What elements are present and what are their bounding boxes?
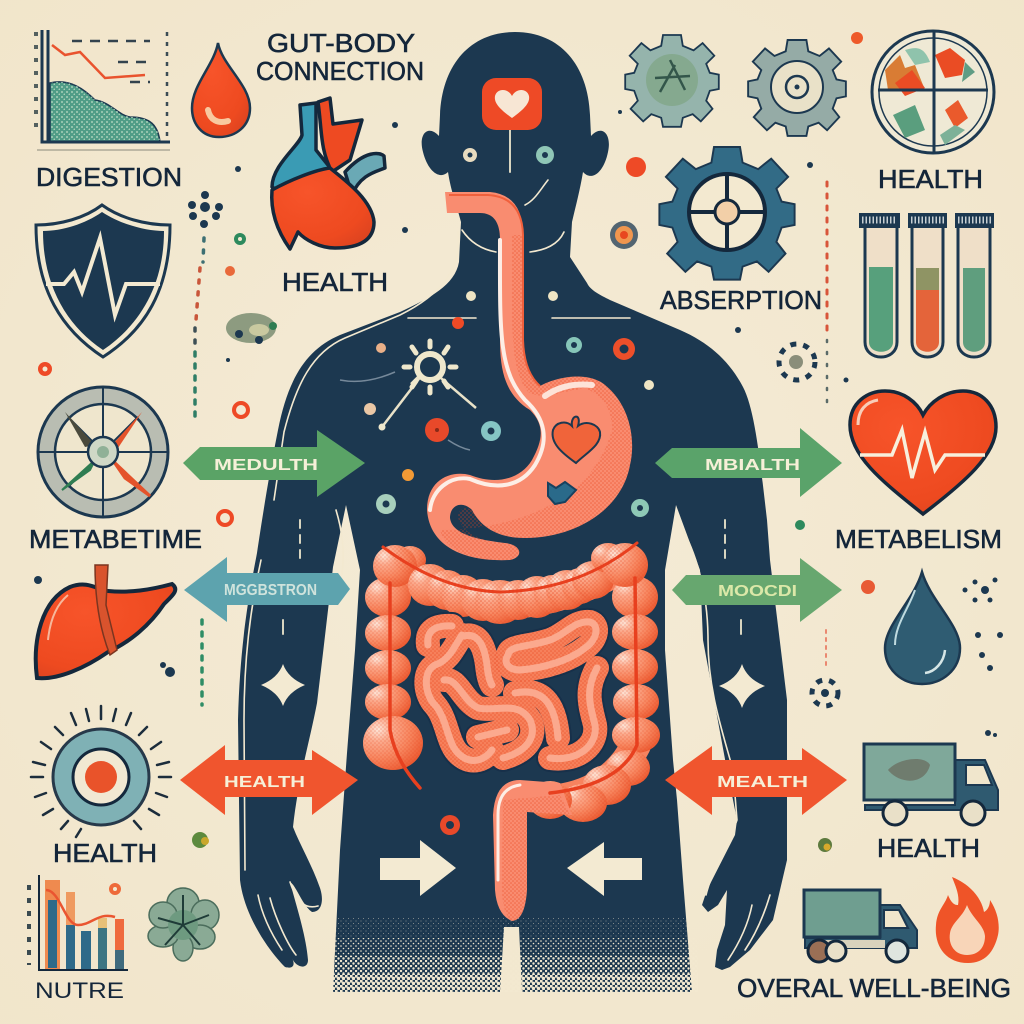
icon: target with rays bbox=[31, 706, 171, 837]
icon: large gear bbox=[659, 147, 795, 280]
label: digestion: DIGESTION bbox=[36, 162, 182, 192]
icon: test tubes bbox=[859, 213, 994, 357]
stomach and esophagus bbox=[427, 192, 632, 560]
red vessel lines bbox=[383, 543, 637, 793]
title bbox=[256, 28, 424, 86]
body silhouette bbox=[238, 32, 787, 992]
icon: flame bbox=[936, 877, 999, 963]
arrow: mhealth bbox=[655, 428, 842, 497]
arrow: health left: HEALTH bbox=[224, 774, 305, 791]
label: health plate: HEALTH bbox=[878, 164, 983, 194]
arrow: mealth bbox=[665, 746, 847, 815]
cream arrows on hips bbox=[380, 840, 642, 896]
icon: delivery truck upper bbox=[864, 744, 998, 825]
label: metabetime: METABETIME bbox=[29, 524, 202, 554]
arrow: teal digestion bbox=[184, 557, 350, 622]
icon: head heart badge bbox=[482, 78, 542, 130]
arrow: mood: MOOCDI bbox=[718, 583, 797, 600]
icon: stomach blue mark bbox=[548, 482, 576, 504]
icon: delivery truck lower bbox=[804, 890, 917, 962]
icon: shield bbox=[36, 205, 170, 357]
arrow: medulth: MEDULTH bbox=[214, 457, 318, 474]
rectum bbox=[493, 780, 572, 921]
arrow: mhealth: MBIALTH bbox=[705, 457, 800, 474]
cream stars on arms bbox=[261, 664, 765, 708]
icon: heart with pulse bbox=[850, 391, 996, 514]
head small nodes bbox=[463, 146, 554, 164]
body contour lines bbox=[244, 180, 770, 960]
icon: leafy cluster bbox=[148, 888, 219, 961]
colon lumps bbox=[363, 543, 660, 822]
label: absorption: ABSERPTION bbox=[660, 285, 822, 315]
icon: anatomical heart bbox=[272, 98, 385, 249]
icon: gear target bbox=[748, 40, 846, 136]
arrow: mealth: MEALTH bbox=[717, 774, 808, 791]
label: health heart: HEALTH bbox=[282, 267, 388, 297]
neck and centre arm ticks bbox=[283, 128, 741, 634]
bar chart: nutrients bbox=[29, 875, 128, 970]
icon: stomach heart bbox=[553, 417, 600, 463]
icon: compass wheel bbox=[38, 387, 168, 517]
icon: blood drop bbox=[192, 43, 250, 137]
icon: plate of food bbox=[872, 31, 994, 153]
label: metabolism: METABELISM bbox=[835, 524, 1002, 554]
halftone leg fade bbox=[330, 918, 698, 992]
title: CONNECTION bbox=[256, 56, 424, 86]
chest nodes and molecule bbox=[340, 291, 654, 835]
arrow: teal digestion: MGGBSTRON bbox=[224, 582, 317, 599]
arrow: medulth bbox=[183, 430, 365, 497]
label: nutre: NUTRE bbox=[35, 978, 124, 1003]
decorative specks and microbes bbox=[34, 32, 1003, 895]
colon bands bbox=[395, 563, 636, 800]
arrow: mood bbox=[672, 558, 842, 622]
icon: liver bbox=[36, 565, 175, 678]
chart: digestion area chart bbox=[36, 30, 170, 150]
large intestine bbox=[363, 543, 660, 921]
label: overall well-being: OVERAL WELL-BEING bbox=[737, 973, 1011, 1003]
label: health truck: HEALTH bbox=[877, 833, 980, 863]
small intestine bbox=[426, 622, 597, 760]
label: health target: HEALTH bbox=[53, 838, 157, 868]
title: GUT-BODY bbox=[267, 28, 415, 58]
arrow: health left bbox=[180, 745, 358, 815]
icon: gear microbe bbox=[625, 35, 719, 127]
icon: water drop bbox=[885, 572, 960, 684]
